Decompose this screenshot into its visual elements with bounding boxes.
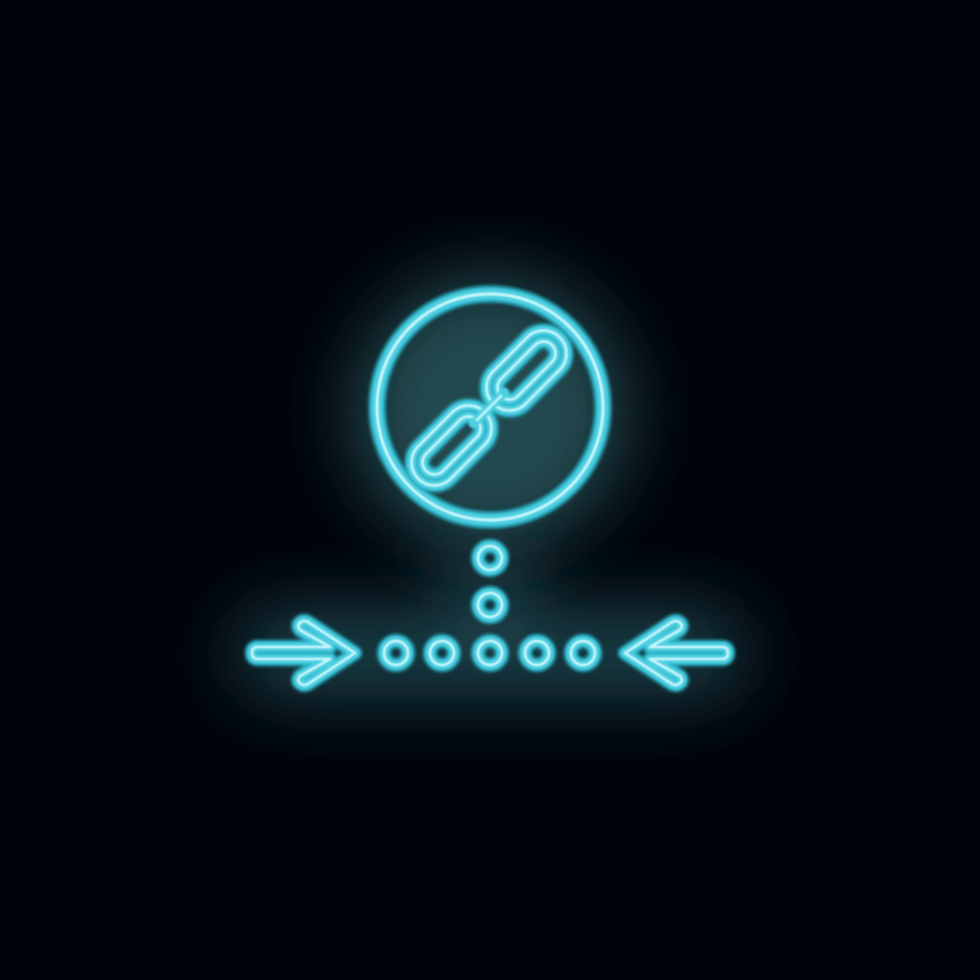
icon: vertical dots	[478, 546, 502, 617]
icon: horizontal dots	[384, 641, 595, 665]
chain connector	[476, 395, 502, 421]
glow: circle	[352, 274, 628, 550]
upper link	[477, 321, 576, 420]
lower link	[402, 396, 501, 495]
glow: lower arrows	[235, 540, 745, 696]
icon: large circle	[377, 294, 603, 520]
connector core	[473, 392, 505, 424]
arrow: right, pointing left	[625, 621, 728, 685]
icon: chain	[402, 321, 576, 495]
arrow: left, pointing right	[252, 621, 355, 685]
